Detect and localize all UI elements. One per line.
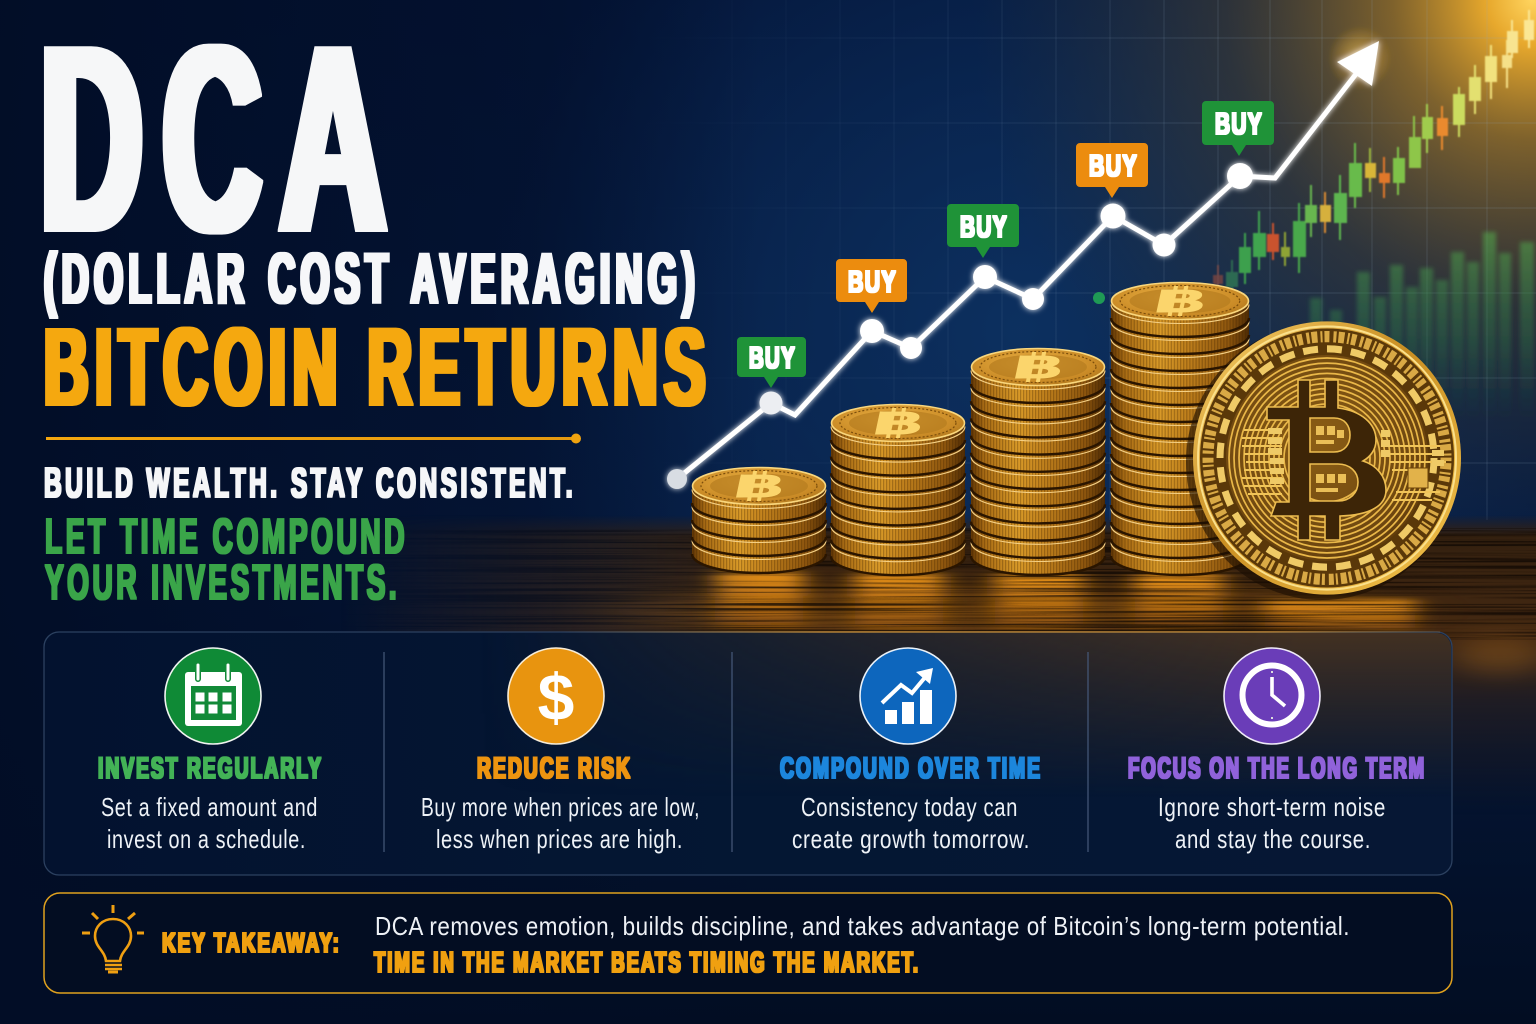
buy tag 1 (737, 337, 806, 388)
circuit traces and pads (1242, 430, 1446, 500)
coin stack 1 (692, 467, 826, 573)
panel: four benefits (44, 632, 1452, 875)
green message: LET TIME COMPOUND (45, 509, 408, 564)
description: and stay the course. (1175, 824, 1371, 854)
coin stack 1: B (731, 468, 788, 504)
description (792, 792, 1030, 854)
buy tag 2: BUY (848, 264, 897, 299)
panel: key takeaway (44, 893, 1452, 993)
heading: INVEST REGULARLY (98, 752, 323, 785)
description (1158, 792, 1386, 854)
description: Ignore short-term noise (1158, 792, 1386, 822)
buy tag 5: BUY (1215, 106, 1263, 141)
subtitle: dollar cost averaging: (DOLLAR COST AVERAGING) (44, 240, 700, 319)
buy tag 5 (1202, 101, 1274, 156)
icon: light bulb (82, 905, 144, 972)
description (101, 792, 318, 854)
description: Buy more when prices are low, (421, 792, 700, 822)
description: less when prices are high. (436, 824, 683, 854)
coin stack 3: B (1010, 349, 1067, 385)
key takeaway label: KEY TAKEAWAY: (162, 927, 341, 958)
small green chart dot (1093, 292, 1105, 304)
heading: bitcoin returns: BITCOIN RETURNS (44, 306, 712, 429)
benefit: reduce risk (421, 648, 700, 854)
bitcoin symbol (1267, 380, 1386, 540)
description (421, 792, 700, 854)
icon: calendar (165, 648, 261, 744)
buy tag 3 (947, 204, 1019, 258)
title rule (46, 434, 581, 444)
coin stack 2 (831, 404, 965, 575)
candlestick chart (1213, 10, 1534, 290)
icon: dollar: $ (538, 660, 574, 734)
icon: clock (1224, 648, 1320, 744)
description: invest on a schedule. (107, 824, 306, 854)
description: create growth tomorrow. (792, 824, 1030, 854)
buy tag 1: BUY (749, 340, 796, 375)
tagline: BUILD WEALTH. STAY CONSISTENT. (44, 459, 576, 506)
benefit: focus on the long term (1128, 648, 1426, 854)
heading: COMPOUND OVER TIME (780, 752, 1042, 785)
coin stack 4: B (1151, 283, 1210, 319)
benefit: compound over time (780, 648, 1042, 854)
title: DCA (40, 0, 386, 288)
takeaway emphasis: TIME IN THE MARKET BEATS TIMING THE MARKET. (374, 947, 920, 979)
buy tag 2 (836, 259, 907, 313)
icon: dollar (508, 648, 604, 744)
description: Consistency today can (801, 792, 1018, 822)
large bitcoin coin (1186, 321, 1461, 600)
heading: REDUCE RISK (477, 752, 632, 785)
line chart with arrow (667, 26, 1392, 489)
volume bars (1200, 232, 1534, 423)
coin stack 4 (1111, 282, 1249, 575)
buy tag 4 (1076, 143, 1148, 198)
wooden table with reflections (398, 517, 1536, 772)
green message: YOUR INVESTMENTS. (45, 555, 400, 610)
coin stack 3 (971, 348, 1105, 575)
description: Set a fixed amount and (101, 792, 318, 822)
buy tag 4: BUY (1089, 148, 1138, 183)
green message (45, 509, 408, 610)
coin stack 2: B (870, 405, 927, 441)
icon: growth chart (860, 648, 956, 744)
buy tag 3: BUY (960, 209, 1008, 244)
takeaway text: DCA removes emotion, builds discipline, and takes advantage of Bitcoin’s long-term potential. (375, 911, 1350, 941)
benefit: invest regularly (98, 648, 323, 854)
